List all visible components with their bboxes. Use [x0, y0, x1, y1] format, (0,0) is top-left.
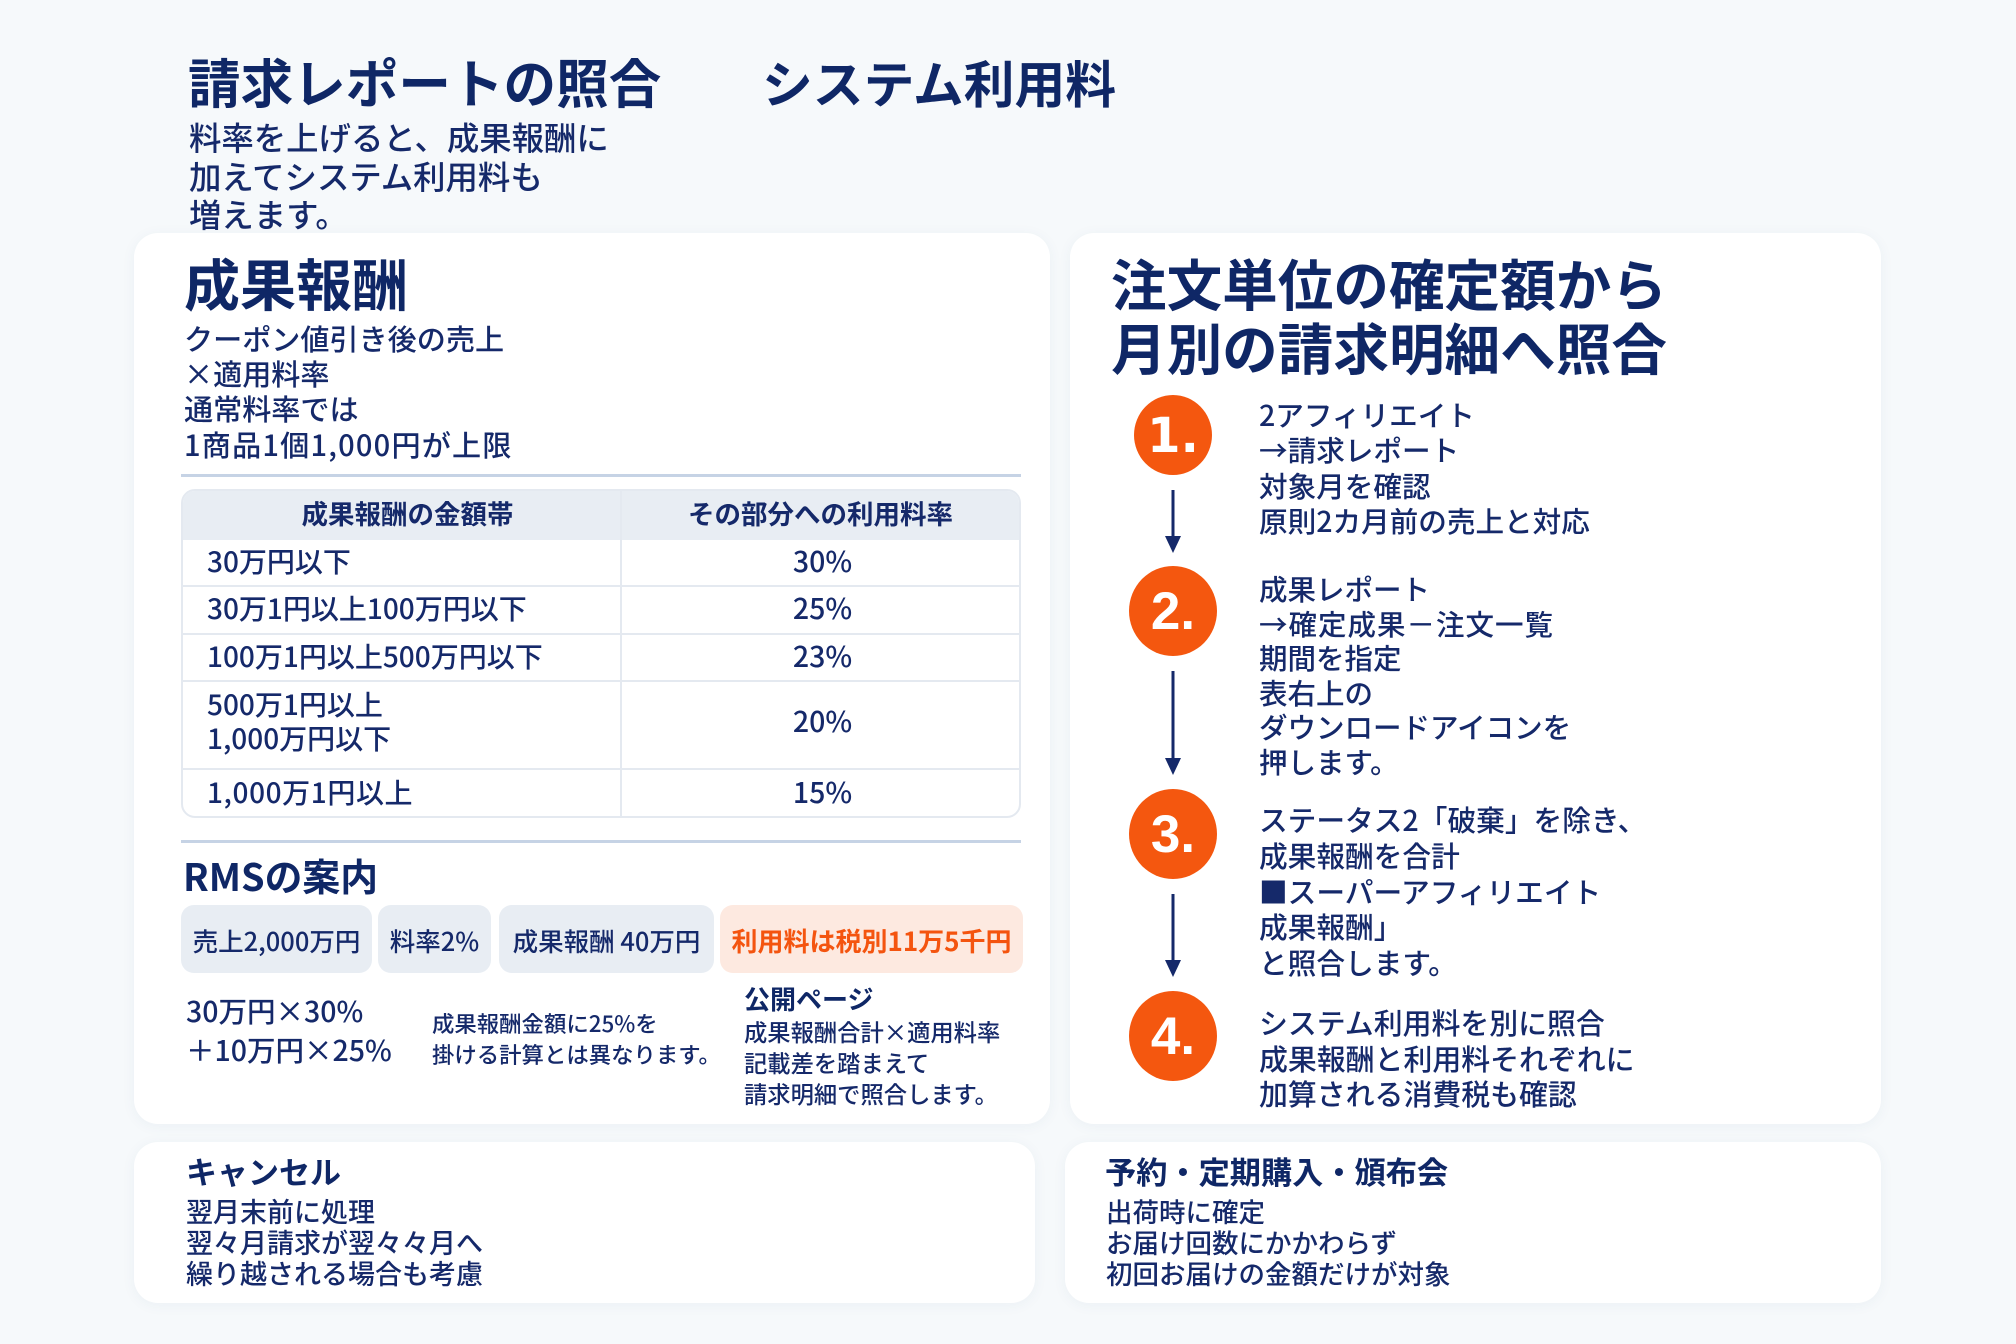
- step 1 badge: [1134, 395, 1212, 475]
- heading: steps title: [1111, 243, 1667, 386]
- step 3 text: 成果報酬」: [1259, 906, 1402, 947]
- intro text: [189, 113, 609, 237]
- text: cancel notes: 繰り越される場合も考慮: [186, 1253, 483, 1292]
- text: public page note: 請求明細で照合します。: [744, 1076, 998, 1110]
- text: cancel notes: 翌々月請求が翌々々月へ: [186, 1222, 483, 1261]
- text: public page note: [744, 1014, 1000, 1110]
- arrow: step 2 to 3: [1165, 671, 1181, 775]
- chip: commission: [499, 905, 714, 973]
- step 3 text: 成果報酬を合計: [1259, 835, 1460, 876]
- table: system fee rates: 100万1円以上500万円以下: [207, 636, 543, 676]
- step 1 text: [1259, 394, 1590, 541]
- table: system fee rates: 1,000万円以下: [207, 718, 391, 758]
- text: calculation note: 掛ける計算とは異なります。: [432, 1038, 721, 1070]
- step 2 text: 表右上の: [1259, 672, 1373, 713]
- table: system fee rates: 30万1円以上100万円以下: [207, 588, 527, 628]
- chip: sales: [181, 905, 372, 973]
- heading: 成果報酬: 成果報酬: [184, 242, 408, 323]
- arrow: step 1 to 2: [1165, 490, 1181, 553]
- chip: rate: 料率2%: [390, 922, 479, 958]
- table: system fee rates: 1,000万1円以上: [207, 772, 413, 812]
- arrow: step 3 to 4: [1165, 894, 1181, 977]
- step 1 text: 対象月を確認: [1259, 465, 1431, 506]
- text: public page note: 成果報酬合計×適用料率: [744, 1014, 1000, 1048]
- table: system fee rates: 15%: [793, 770, 852, 812]
- text: cancel notes: [186, 1191, 483, 1292]
- heading: 公開ページ: 公開ページ: [744, 980, 873, 1017]
- chip: fee highlight: [720, 905, 1023, 973]
- table: system fee rates: その部分への利用料率: [688, 493, 953, 532]
- table: system fee rates: 25%: [793, 587, 852, 628]
- step 3 text: ■スーパーアフィリエイト: [1259, 870, 1601, 912]
- step 2 text: →確定成果－注文一覧: [1259, 603, 1554, 644]
- title: システム利用料: システム利用料: [762, 44, 1116, 118]
- text: formula: ＋10万円×25%: [186, 1028, 392, 1070]
- chip: sales: 売上2,000万円: [193, 922, 360, 958]
- step 2 text: 期間を指定: [1259, 637, 1402, 678]
- step 4 badge: 4.: [1151, 1007, 1195, 1066]
- step 2 badge: [1129, 566, 1217, 656]
- step 2 text: 押します。: [1259, 741, 1399, 782]
- chip: fee highlight: 利用料は税別11万5千円: [731, 922, 1012, 958]
- table: system fee rates: 500万1円以上: [207, 684, 383, 724]
- step 4 text: システム利用料を別に照合: [1259, 1001, 1605, 1043]
- heading: RMSの案内: RMSの案内: [183, 847, 378, 902]
- panel: reconciliation steps: [1070, 233, 1881, 1124]
- text: calculation basis: ×適用料率: [184, 352, 329, 394]
- step 1 text: 2アフィリエイト: [1259, 394, 1475, 435]
- table: system fee rates: 20%: [793, 700, 852, 740]
- text: calculation basis: 1商品1個1,000円が上限: [184, 423, 513, 465]
- heading: 予約・定期購入・頒布会: 予約・定期購入・頒布会: [1105, 1148, 1448, 1193]
- table: system fee rates: 成果報酬の金額帯: [302, 493, 514, 532]
- text: calculation basis: [184, 317, 513, 465]
- intro text: 加えてシステム利用料も: [189, 152, 543, 198]
- chip: rate: [378, 905, 491, 973]
- text: formula: 30万円×30%: [186, 990, 363, 1031]
- heading: キャンセル: キャンセル: [186, 1148, 341, 1193]
- text: public page note: 記載差を踏まえて: [744, 1045, 929, 1079]
- chips: RMS example: [181, 905, 1023, 973]
- text: formula: [186, 990, 392, 1070]
- text: subscription notes: 初回お届けの金額だけが対象: [1106, 1253, 1450, 1292]
- text: subscription notes: [1106, 1191, 1450, 1292]
- step 4 text: [1259, 1001, 1635, 1114]
- intro text: 料率を上げると、成果報酬に: [189, 113, 609, 160]
- step 4 text: 成果報酬と利用料それぞれに: [1259, 1036, 1635, 1078]
- panel: キャンセル: [134, 1142, 1035, 1303]
- table: system fee rates: [181, 489, 1021, 818]
- step 4 badge: [1129, 991, 1217, 1081]
- panel: 成果報酬: [134, 233, 1050, 1124]
- step 2 text: ダウンロードアイコンを: [1259, 706, 1571, 747]
- panel: 予約・定期購入・頒布会: [1065, 1142, 1881, 1303]
- step 1 badge: 1.: [1147, 408, 1199, 464]
- table: system fee rates: 23%: [793, 634, 852, 676]
- text: calculation note: [432, 1007, 721, 1070]
- table: system fee rates: 30%: [793, 540, 852, 580]
- step 2 badge: 2.: [1151, 582, 1195, 641]
- step 3 badge: 3.: [1151, 805, 1195, 864]
- step 2 text: [1259, 568, 1571, 782]
- step 3 text: ステータス2「破棄」を除き、: [1259, 799, 1646, 840]
- step 2 text: 成果レポート: [1259, 568, 1430, 609]
- step 3 text: [1259, 799, 1646, 983]
- table: system fee rates: 30万円以下: [207, 540, 351, 580]
- text: calculation note: 成果報酬金額に25%を: [432, 1007, 658, 1039]
- chip: commission: 成果報酬 40万円: [513, 922, 700, 958]
- step 3 text: と照合します。: [1259, 942, 1457, 983]
- step 3 badge: [1129, 789, 1217, 879]
- heading: steps title: 月別の請求明細へ照合: [1111, 306, 1667, 386]
- step 1 text: 原則2カ月前の売上と対応: [1259, 500, 1590, 541]
- text: calculation basis: クーポン値引き後の売上: [184, 317, 504, 359]
- step 1 text: →請求レポート: [1259, 429, 1459, 470]
- title: 請求レポートの照合: 請求レポートの照合: [188, 43, 661, 119]
- text: cancel notes: 翌月末前に処理: [186, 1191, 375, 1230]
- heading: steps title: 注文単位の確定額から: [1111, 243, 1667, 323]
- text: subscription notes: 出荷時に確定: [1106, 1191, 1265, 1230]
- text: calculation basis: 通常料率では: [184, 387, 359, 429]
- intro text: 増えます。: [189, 190, 348, 237]
- step 4 text: 加算される消費税も確認: [1259, 1072, 1577, 1114]
- text: subscription notes: お届け回数にかかわらず: [1106, 1222, 1397, 1261]
